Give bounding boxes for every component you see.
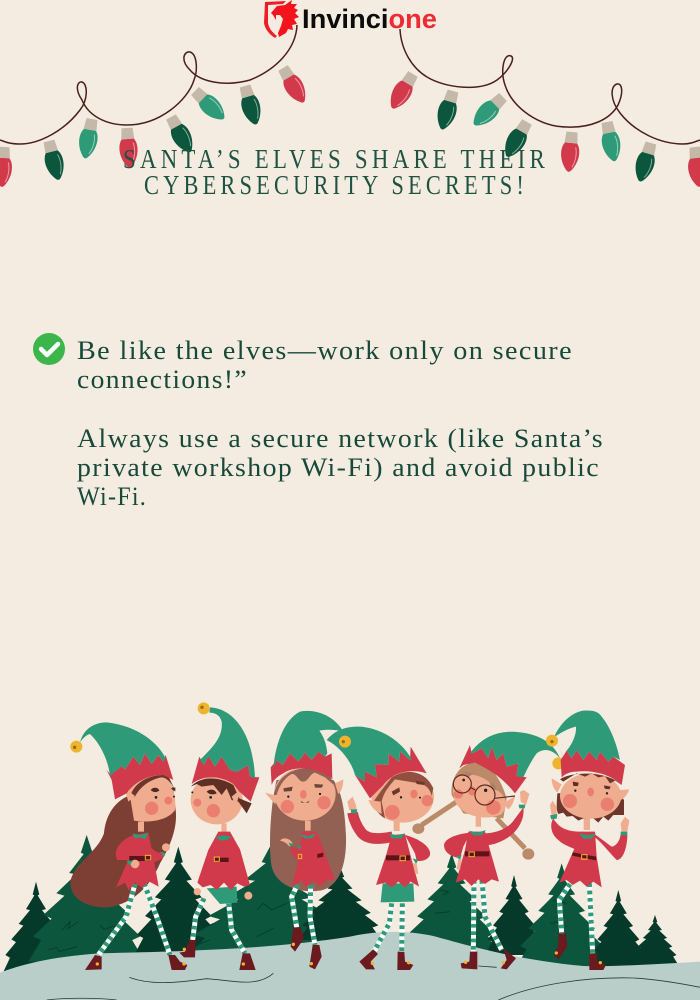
title: [123, 144, 549, 200]
body text: Wi-Fi.: [77, 482, 147, 511]
string lights: right: [385, 29, 700, 188]
body text: connections!”: [77, 365, 248, 394]
winter scene: [0, 702, 700, 1000]
elf 3: [265, 711, 346, 969]
body text: Always use a secure network (like Santa’s: [77, 424, 604, 453]
logo wordmark: Invincione: [302, 4, 437, 34]
logo: [264, 0, 437, 38]
elf 1: [70, 722, 187, 970]
icon: shield and phoenix: [264, 0, 299, 38]
title: CYBERSECURITY SECRETS!: [144, 170, 528, 200]
icon: green check: [33, 333, 65, 365]
string lights: left: [0, 25, 311, 187]
elf 4: [327, 727, 434, 970]
body text: private workshop Wi-Fi) and avoid public: [77, 453, 600, 482]
snowy ground: [0, 932, 700, 1000]
snow contour lines: [47, 966, 700, 1000]
elf 5: [412, 732, 564, 969]
body text: [77, 336, 604, 511]
body text: Be like the elves—work only on secure: [77, 336, 573, 365]
elf 6: [546, 711, 629, 970]
title: SANTA’S ELVES SHARE THEIR: [123, 144, 549, 174]
elf 2: [179, 702, 259, 970]
pine trees: [3, 835, 678, 973]
